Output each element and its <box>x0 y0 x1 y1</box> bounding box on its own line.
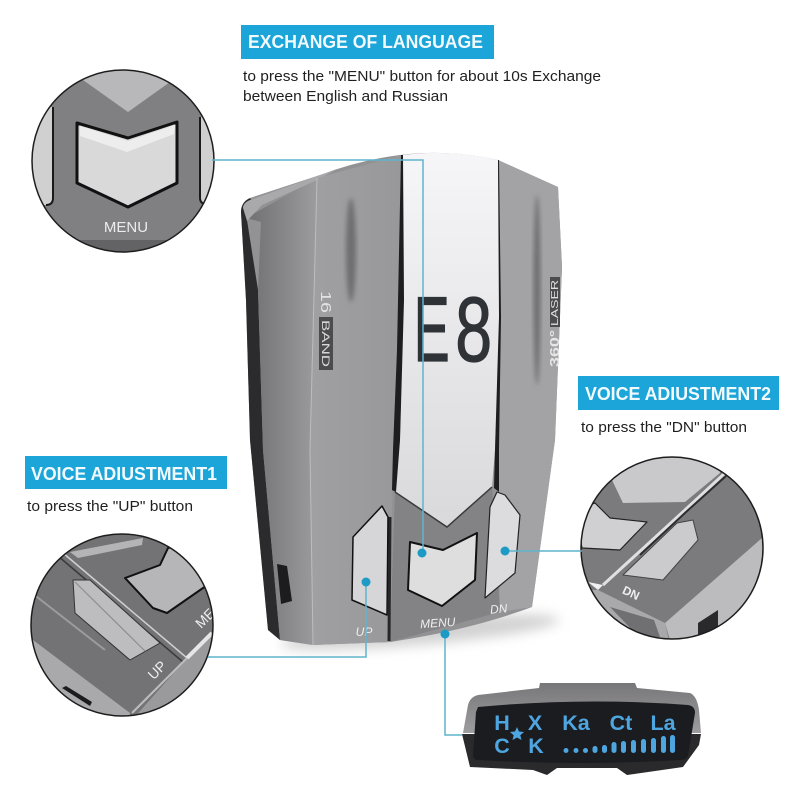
heading: voice adjustment 1 <box>25 456 227 489</box>
device shell <box>241 153 562 645</box>
band badge: 16 <box>317 291 334 313</box>
model name <box>414 277 492 381</box>
circle detail: up button <box>30 532 218 720</box>
laser badge <box>547 277 562 367</box>
callout: exchange of language <box>241 25 601 105</box>
text: exchange instructions <box>243 68 601 105</box>
callout: voice adjustment 1 <box>25 456 227 515</box>
display letters: C <box>494 734 510 758</box>
up button close-up <box>73 580 160 660</box>
dn label: DN <box>489 601 508 617</box>
circle detail: dn button <box>580 456 764 640</box>
usb port <box>277 564 292 604</box>
dn button <box>485 492 520 598</box>
menu label: MENU <box>420 615 456 631</box>
heading: exchange of language: EXCHANGE OF LANGUAGE <box>248 32 483 52</box>
display letters: X <box>528 711 543 735</box>
display letters: Ka <box>562 711 591 735</box>
band badge: BAND <box>319 320 331 367</box>
display letters: La <box>650 711 677 735</box>
laser badge: LASER <box>550 280 561 326</box>
heading: voice adjustment 1: VOICE ADIUSTMENT1 <box>31 464 217 484</box>
laser badge: 360° <box>547 330 562 367</box>
white centre panel <box>395 153 500 527</box>
display letters: Ct <box>610 711 632 735</box>
heading: voice adjustment 2: VOICE ADIUSTMENT2 <box>585 384 771 404</box>
menu text: MENU <box>104 219 148 236</box>
signal bars <box>564 735 675 753</box>
model name: 8 <box>455 277 492 381</box>
dn button close-up <box>623 520 698 580</box>
up button <box>352 506 388 615</box>
display letters <box>494 711 677 758</box>
heading: voice adjustment 2 <box>578 376 779 410</box>
display letters: H <box>494 711 510 735</box>
band badge <box>317 291 334 370</box>
connector: up button to up circle <box>208 578 370 657</box>
connector: menu circle to menu button <box>212 160 426 558</box>
product: radar detector body <box>241 153 562 657</box>
connector: dn button to dn circle <box>500 546 582 556</box>
display letters: K <box>528 734 544 758</box>
up text: UP <box>144 657 170 683</box>
heading: exchange of language <box>241 25 494 59</box>
up label: UP <box>356 625 372 639</box>
icon: star <box>510 727 524 740</box>
model name: E <box>414 278 450 381</box>
circle detail: menu button <box>31 69 215 253</box>
callout: voice adjustment 2 <box>578 376 779 436</box>
text: up instructions: to press the "UP" button <box>27 498 193 515</box>
connector: device to display <box>440 630 462 735</box>
text: exchange instructions: to press the "MENU" button for about 10s Exchange <box>243 68 601 85</box>
text: exchange instructions: between English and Russian <box>243 88 448 105</box>
menu button <box>408 533 477 606</box>
dn text: DN <box>620 583 642 603</box>
text: dn instructions: to press the "DN" button <box>581 419 747 436</box>
display panel <box>462 683 701 775</box>
partial menu text: ME <box>192 605 218 631</box>
